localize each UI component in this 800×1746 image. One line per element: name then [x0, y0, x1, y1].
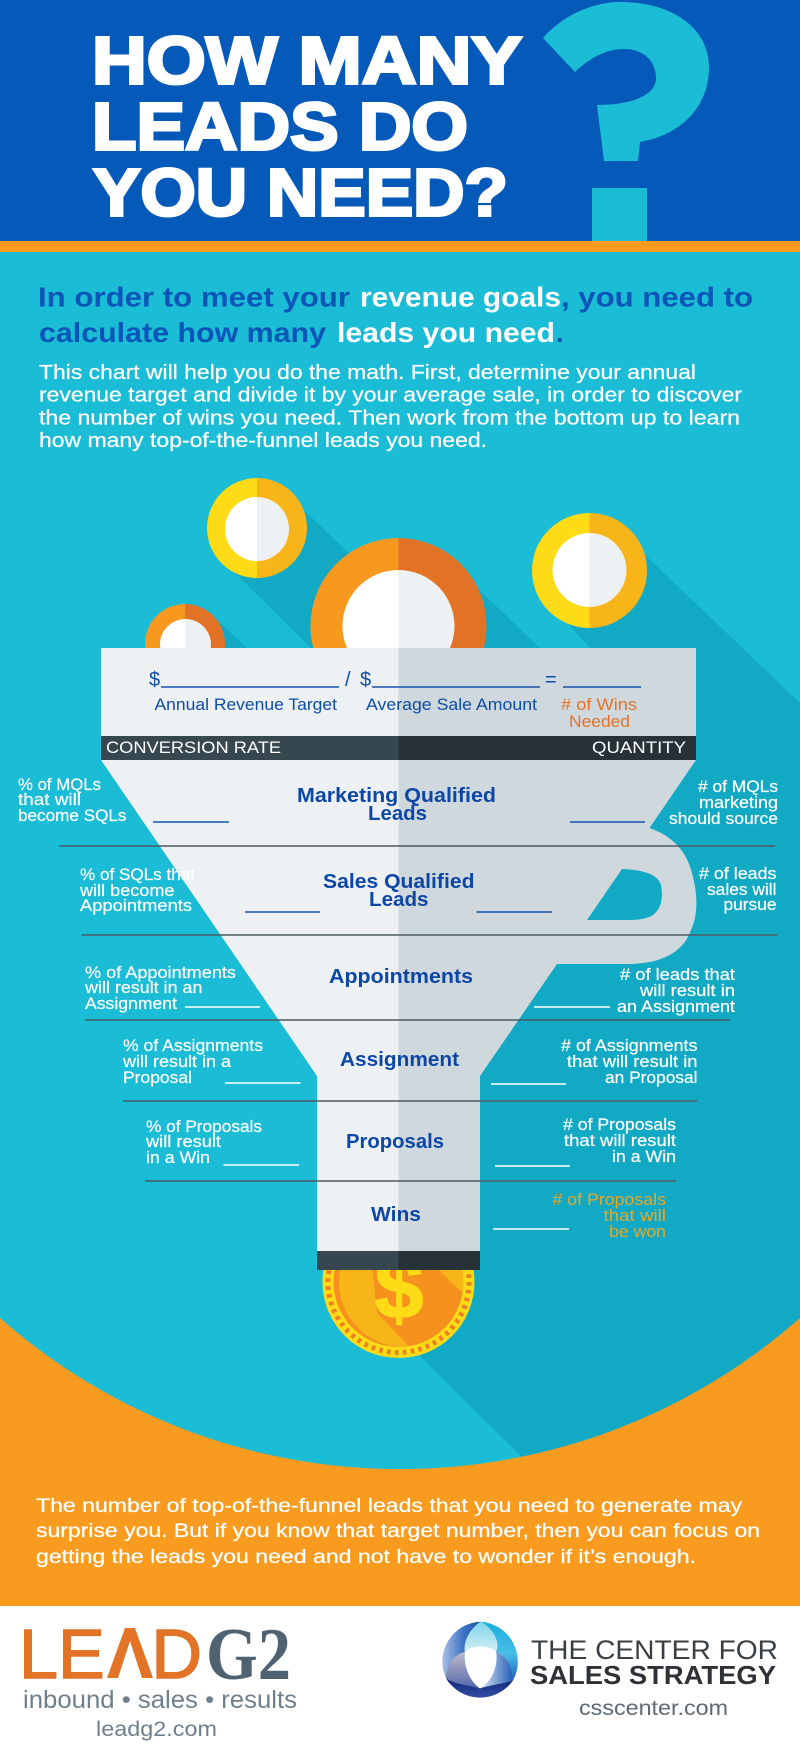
intro paragraph: how many top-of-the-funnel leads you need. — [39, 429, 487, 452]
subheading: revenue goals — [360, 282, 561, 312]
subheading — [38, 282, 753, 348]
coin: top yellow — [207, 478, 307, 578]
row: marketing qualified leads: Marketing Qualified — [297, 784, 496, 807]
row: assignment: # of Assignments — [561, 1036, 698, 1055]
logo: LeadG2 — [19, 1614, 297, 1741]
background: teal panel — [0, 252, 800, 1606]
formula: revenue / sale = wins — [149, 669, 641, 731]
row: proposals: # of Proposals — [563, 1115, 676, 1134]
formula: revenue / sale = wins: # of Wins — [561, 695, 637, 714]
row: appointments: an Assignment — [617, 997, 735, 1016]
orange lower panel — [0, 1318, 800, 1606]
logo: The Center for Sales Strategy: csscenter.com — [579, 1697, 728, 1720]
row: proposals: Proposals — [346, 1130, 444, 1153]
subheading: . — [556, 317, 564, 348]
row: appointments: # of leads that — [620, 965, 735, 984]
row: appointments: will result in — [639, 981, 735, 1000]
row: wins: that will — [604, 1206, 666, 1225]
row: assignment — [122, 1036, 698, 1087]
row: assignment: % of Assignments — [123, 1036, 263, 1055]
funnel right half with handle — [398, 648, 696, 1251]
logo: The Center for Sales Strategy — [442, 1622, 778, 1720]
subheading: leads you need — [337, 317, 555, 348]
row: marketing qualified leads: become SQLs — [18, 806, 126, 825]
subheading: In order to meet your — [38, 282, 350, 312]
footer panel — [0, 1606, 800, 1746]
conversion header bar: QUANTITY — [592, 738, 686, 757]
intro paragraph: the number of wins you need. Then work from the bottom up to learn — [39, 406, 740, 429]
formula: revenue / sale = wins: Annual Revenue Target — [154, 695, 337, 714]
icon: falling coins — [145, 478, 647, 714]
row: sales qualified leads: will become — [79, 881, 174, 900]
row: marketing qualified leads: marketing — [699, 793, 778, 812]
intro paragraph: revenue target and divide it by your average sale, in order to discover — [39, 384, 742, 407]
row: appointments: Appointments — [329, 965, 473, 988]
intro paragraph — [39, 361, 742, 452]
row: marketing qualified leads: # of MQLs — [698, 777, 778, 796]
row: wins: # of Proposals — [552, 1190, 666, 1209]
icon: large question mark — [543, 2, 709, 241]
row: proposals: will result — [145, 1132, 221, 1151]
logo: LeadG2: inbound • sales • results — [23, 1686, 297, 1714]
icon: three-petal circle — [442, 1622, 518, 1698]
row dividers — [59, 846, 777, 1181]
row: sales qualified leads — [79, 864, 776, 915]
title: YOU NEED? — [93, 156, 508, 230]
row: proposals: in a Win — [146, 1148, 210, 1167]
row: assignment: an Proposal — [605, 1068, 698, 1087]
subheading: calculate how many — [39, 317, 327, 348]
long shadows behind coins and funnel — [150, 512, 800, 1500]
formula: revenue / sale = wins: Needed — [569, 712, 630, 731]
funnel spout bar — [317, 1251, 480, 1270]
formula: revenue / sale = wins: Average Sale Amount — [366, 695, 537, 714]
icon: dollar coin at funnel spout: $ — [375, 1238, 423, 1337]
row: appointments: will result in an — [84, 978, 202, 997]
row: appointments — [84, 963, 735, 1016]
row: sales qualified leads: # of leads — [699, 864, 776, 883]
row: marketing qualified leads: should source — [669, 809, 778, 828]
header band — [0, 0, 800, 241]
row: assignment: will result in a — [122, 1052, 232, 1071]
funnel left half — [101, 648, 398, 1251]
row: sales qualified leads: pursue — [724, 895, 776, 914]
conversion header bar: CONVERSION RATE — [106, 738, 281, 757]
row: wins: be won — [609, 1222, 666, 1241]
row: wins — [371, 1190, 666, 1241]
logo: The Center for Sales Strategy: SALES STRATEGY — [530, 1660, 776, 1690]
closing paragraph: getting the leads you need and not have to wonder if it’s enough. — [36, 1547, 696, 1568]
row: sales qualified leads: % of SQLs that — [80, 865, 195, 884]
logo: LeadG2: G2 — [206, 1614, 291, 1696]
coin: right yellow — [532, 513, 647, 628]
row: sales qualified leads: Sales Qualified — [323, 870, 474, 893]
orange divider strip — [0, 241, 800, 252]
row: proposals: that will result — [564, 1131, 676, 1150]
closing paragraph: surprise you. But if you know that target number, then you can focus on — [36, 1521, 760, 1542]
logo: LeadG2: LEAD — [19, 1615, 202, 1693]
row: proposals: in a Win — [612, 1147, 676, 1166]
formula: revenue / sale = wins: = — [545, 669, 557, 691]
coin: small orange — [145, 604, 225, 684]
row: wins: Wins — [371, 1203, 421, 1226]
logo: LeadG2: leadg2.com — [96, 1718, 217, 1741]
formula: revenue / sale = wins: $ — [360, 669, 371, 691]
row: appointments: Assignment — [85, 994, 177, 1013]
row: marketing qualified leads: that will — [18, 790, 81, 809]
title: LEADS DO — [92, 90, 468, 164]
row: assignment: Assignment — [340, 1048, 459, 1071]
row: proposals — [145, 1115, 676, 1167]
icon: dollar coin at funnel spout — [322, 1270, 474, 1358]
row: sales qualified leads: Appointments — [80, 896, 192, 915]
row: sales qualified leads: sales will — [707, 880, 776, 899]
intro paragraph: This chart will help you do the math. First, determine your annual — [39, 361, 696, 384]
formula: revenue / sale = wins: / — [345, 669, 351, 691]
row: assignment: Proposal — [123, 1068, 192, 1087]
title — [92, 24, 522, 230]
coin: big orange — [310, 538, 486, 714]
row: proposals: % of Proposals — [146, 1117, 262, 1136]
row: marketing qualified leads: % of MQLs — [18, 775, 101, 794]
logo: The Center for Sales Strategy: THE CENTER FOR — [531, 1635, 778, 1665]
conversion header bar — [101, 736, 696, 760]
funnel — [101, 648, 696, 1270]
row: marketing qualified leads: Leads — [368, 802, 427, 825]
row: assignment: that will result in — [567, 1052, 698, 1071]
closing paragraph — [36, 1496, 760, 1568]
subheading: , you need to — [561, 282, 753, 312]
row: sales qualified leads: Leads — [369, 888, 428, 911]
closing paragraph: The number of top-of-the-funnel leads that you need to generate may — [36, 1496, 743, 1517]
formula: revenue / sale = wins: $ — [149, 669, 160, 691]
title: HOW MANY — [92, 24, 522, 98]
row: appointments: % of Appointments — [85, 963, 236, 982]
row: marketing qualified leads — [18, 775, 778, 828]
